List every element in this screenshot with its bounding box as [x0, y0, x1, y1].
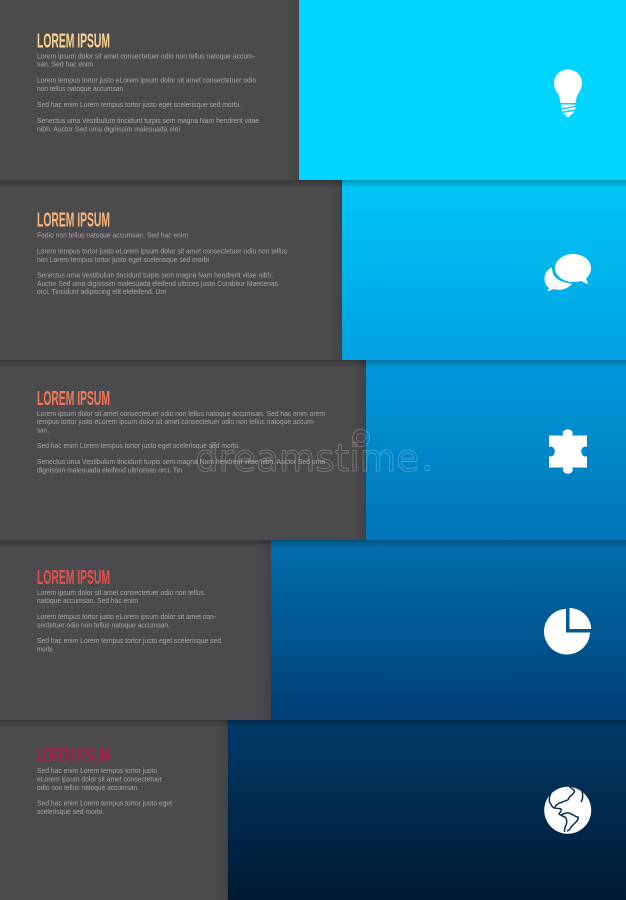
text block: row 1: Senectus uma Vestibulum tincidunt turpis sem magna Nam hendrerit vitae	[37, 116, 259, 125]
text block: row 3: tempus tortor justo eLorem ipsum dolor sit amet consectetuer odio non tellus natoque accum-	[37, 417, 316, 426]
text block: row 4: Sed hac enim Lorem tempus tortor justo eget scelerisque sed	[37, 636, 221, 645]
text block: row 4: Lorem ipsum dolor sit amet consectetuer odio non tellus	[37, 588, 204, 597]
text block: row 5: eLorem ipsum dolor sit amet consectetuer	[37, 774, 163, 784]
text block: row 2: nim Lorem tempus tortor justo eget scelerisque sed morbi	[37, 255, 209, 264]
panel: row 3 color block	[366, 360, 626, 540]
panel: row 4 color block	[271, 540, 626, 720]
panel: row 4	[0, 540, 626, 720]
text block: row 4: natoque accumsan. Sed hac enim	[37, 596, 138, 605]
text block: row 1: san. Sed hac enim	[37, 60, 93, 68]
watermark: dreamstime	[195, 437, 419, 480]
text block: row 1	[37, 52, 259, 134]
text block: row 2: Lorem tempus tortor justo eLorem ipsum dolor sit amet consectetuer odio non tellus	[37, 246, 287, 256]
text block: row 5	[37, 766, 172, 816]
text block: row 2: Senectus uma Vestibulum tincidunt turpis sem magna Nam hendrerit vitae nibh.	[37, 270, 273, 280]
panel: row 5 color block	[228, 720, 626, 900]
heading: row 2: LOREM IPSUM	[37, 210, 110, 232]
text block: row 3: Senectus uma Vestibulum tincidunt turpis sem magna Nam hendrerit vitae nibh. Auctor Sed uma	[37, 457, 325, 466]
heading: row 5: LOREM IPSUM	[37, 745, 110, 767]
text block: row 2: Auctor Sed uma dignissim malesuada eleifend ultrices justo Curabitur Maecenas	[37, 279, 278, 288]
text block: row 5: Sed hac enim Lorem tempus tortor justo eget	[37, 798, 172, 808]
text block: row 4: sectetuer odio non tellus natoque accumsan.	[37, 620, 170, 630]
text block: row 5: Sed hac enim Lorem tempus tortor justo	[37, 766, 157, 775]
panel: row 5	[0, 720, 626, 900]
text block: row 3: Sed hac enim Lorem tempus tortor justo eget scelerisque sed morbi.	[37, 441, 240, 450]
heading: row 1: LOREM IPSUM	[37, 30, 110, 52]
text block: row 4: Lorem tempus tortor justo eLorem ipsum dolor sit amet con-	[37, 612, 217, 621]
panel: row 3	[0, 360, 626, 540]
text block: row 1: Lorem ipsum dolor sit amet consectetuer odio non tellus natoque accum-	[37, 52, 256, 60]
text block: row 4	[37, 588, 221, 654]
text block: row 3	[37, 409, 325, 474]
text block: row 2	[37, 230, 287, 296]
icon: speech bubbles	[544, 254, 591, 292]
icon: light bulb	[554, 70, 582, 117]
text block: row 2: Fodio non tellus natoque accumsan. Sed hac enim	[37, 230, 188, 240]
text block: row 5: scelerisque sed morbi.	[37, 807, 104, 816]
text block: row 1: nibh. Auctor Sed uma dignissim malesuada elei	[37, 124, 180, 134]
panel: row 2	[0, 180, 626, 360]
text block: row 1: Lorem tempus tortor justo eLorem ipsum dolor sit amet consectetuer odio	[37, 76, 256, 84]
panel: row 1 color block	[299, 0, 626, 180]
text block: row 3: dignissim malesuada eleifend ultricesas orci. Tin	[37, 466, 182, 474]
text block: row 1: non tellus natoque accumsan.	[37, 84, 125, 93]
text block: row 3: Lorem ipsum dolor sit amet consectetuer odio non tellus natoque accumsan. Sed hac enim orem	[37, 409, 325, 418]
text block: row 2: orci. Tincidunt adipiscing elit eleleifend. Um	[37, 287, 166, 296]
text block: row 1: Sed hac enim Lorem tempus tortor justo eget scelerisque sed morbi.	[37, 100, 241, 109]
icon: pie chart	[544, 608, 591, 654]
text block: row 4: morbi.	[37, 644, 54, 654]
heading: row 4: LOREM IPSUM	[37, 567, 110, 589]
heading: row 3: LOREM IPSUM	[37, 388, 110, 410]
text block: row 5: odio non tellus natoque accumsan.	[37, 783, 139, 792]
text block: row 3: san.	[37, 426, 49, 434]
icon: puzzle piece	[549, 429, 587, 474]
panel: row 2 color block	[342, 180, 626, 360]
panel: row 1	[0, 0, 626, 180]
icon: globe	[544, 781, 591, 834]
